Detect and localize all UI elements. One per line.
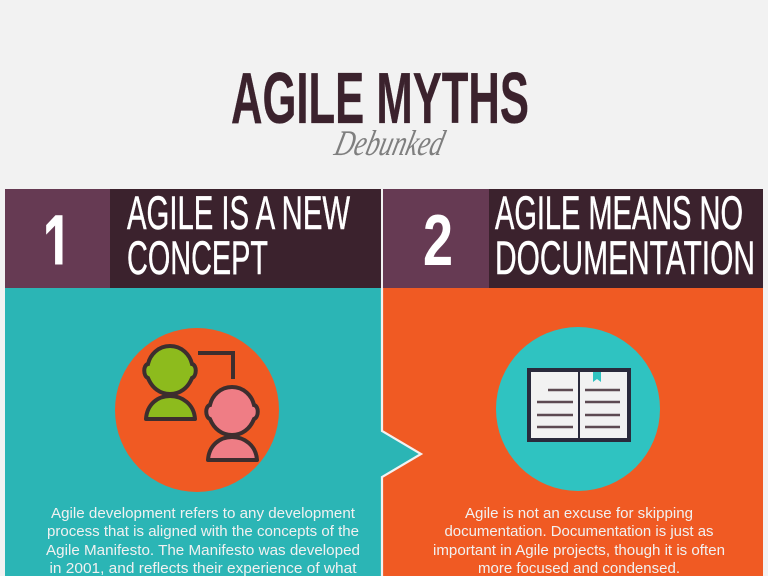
body text 2 bbox=[433, 506, 725, 576]
body text 2: important in Agile projects, though it is often bbox=[433, 543, 725, 559]
heading 2 bbox=[495, 186, 755, 284]
body text 1: Agile Manifesto. The Manifesto was developed bbox=[46, 543, 360, 559]
panel 2 background bbox=[383, 288, 763, 576]
body text 2: Agile is not an excuse for skipping bbox=[465, 506, 693, 522]
panel 1 number box bbox=[5, 189, 110, 288]
icon: open book bbox=[496, 327, 660, 491]
body text 2: documentation. Documentation is just as bbox=[444, 524, 714, 540]
body text 1: process that is aligned with the concepts of the bbox=[47, 524, 359, 540]
panel: myth 1 bbox=[5, 186, 383, 576]
panel: myth 2 bbox=[383, 186, 763, 576]
body text 1: Agile development refers to any development bbox=[51, 506, 355, 522]
panel 2 heading box bbox=[489, 189, 763, 288]
panel 1 heading box bbox=[110, 189, 381, 288]
heading 1: CONCEPT bbox=[127, 231, 268, 284]
heading 1: AGILE IS A NEW bbox=[127, 186, 350, 239]
number 1: 1 bbox=[42, 196, 72, 295]
panel 2 number box bbox=[383, 189, 489, 288]
subtitle: Debunked bbox=[330, 123, 450, 163]
arrow: speech pointer between panels bbox=[382, 288, 421, 576]
heading 1 bbox=[127, 186, 350, 284]
title: AGILE MYTHS bbox=[231, 58, 529, 139]
body text 1 bbox=[46, 506, 360, 576]
panel 1 background bbox=[5, 288, 383, 576]
icon: two people bbox=[115, 328, 279, 492]
number 2: 2 bbox=[423, 201, 453, 281]
